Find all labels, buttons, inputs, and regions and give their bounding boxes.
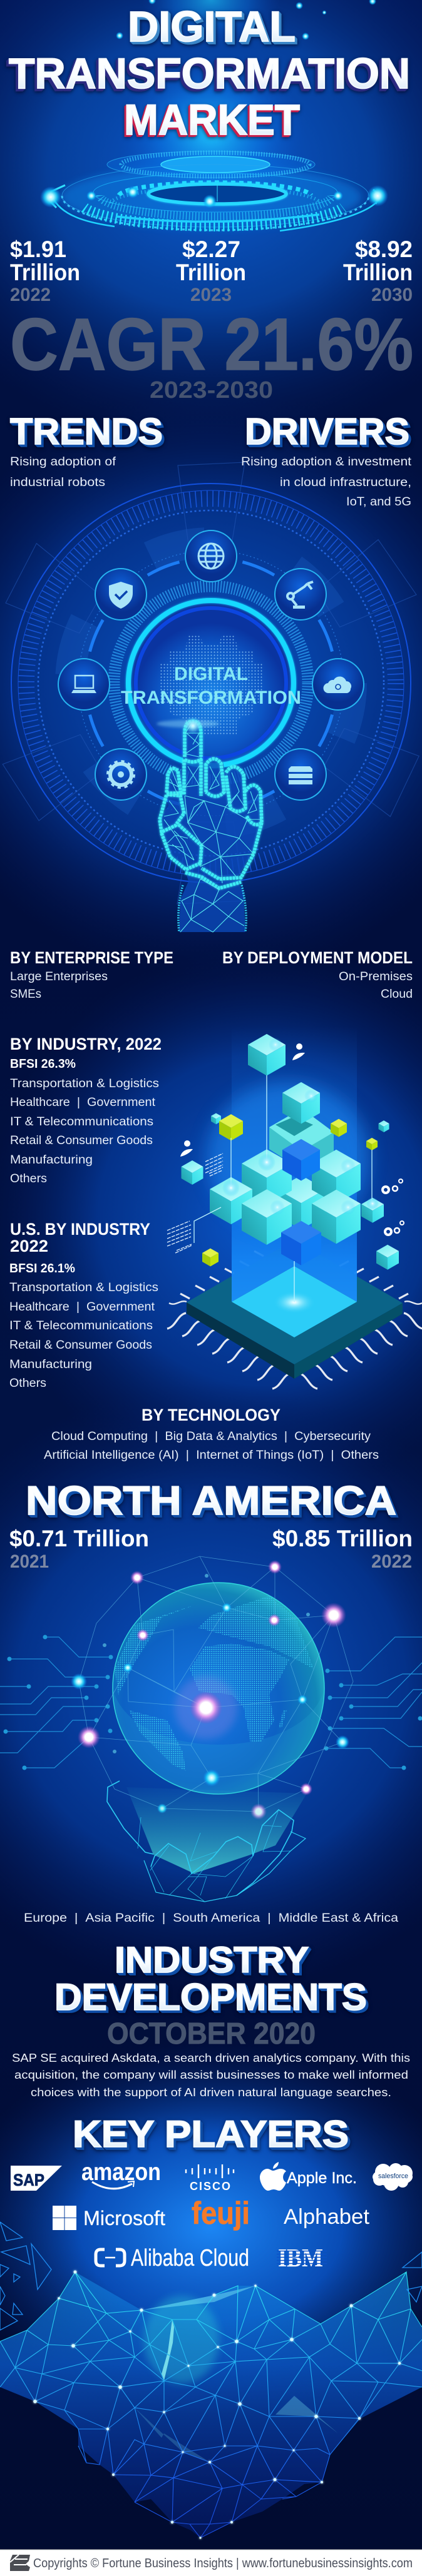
digital transformation circular diagram [3,462,422,904]
logo: amazon: amazon [81,2159,161,2186]
US by industry 2022: U.S. BY INDUSTRY [10,1220,150,1239]
by technology: BY TECHNOLOGY [142,1406,280,1424]
hologram rings and top light glow [40,0,388,231]
by industry 2022: Manufacturing [10,1154,93,1167]
US by industry 2022: Others [9,1377,46,1390]
fragment triangles [0,2222,422,2330]
icon: cloud [312,659,364,710]
icon: server [275,749,326,800]
title: DIGITAL [128,3,296,51]
logo: SAP: SAP [13,2171,44,2189]
title: TRANSFORMATION [9,49,410,98]
title [9,3,410,144]
drivers block: in cloud infrastructure, [280,476,411,489]
by deployment model: On-Premises [339,970,413,983]
by industry 2022: Retail & Consumer Goods [10,1134,153,1147]
data lines [167,1154,223,1253]
isometric chip and cubes illustration [167,1026,422,1389]
back teal block [269,1108,334,1170]
north america heading and values: NORTH AMERICA [26,1478,396,1523]
globe illustration [0,1556,422,1902]
logo: IBM: IBM [278,2243,323,2272]
US by industry 2022: IT & Telecommunications [9,1319,153,1332]
person icons [180,1043,305,1157]
US by industry 2022: Healthcare | Government [9,1301,155,1314]
market size stats: 2023 [190,285,232,305]
icon: laptop [58,659,110,710]
logo: Alibaba Cloud: Alibaba Cloud [131,2245,249,2271]
market size stats: Trillion [176,260,246,285]
logo: Alphabet: Alphabet [284,2205,370,2229]
logo: salesforce [373,2163,413,2191]
trends block [10,411,163,489]
logo: Apple Inc. [260,2162,357,2191]
trends block: TRENDS [10,411,163,452]
by enterprise type: BY ENTERPRISE TYPE [10,948,173,967]
by industry 2022: Healthcare | Government [10,1096,156,1109]
by deployment model [222,948,413,1001]
icon: gear [95,749,147,800]
by industry 2022: BY INDUSTRY, 2022 [10,1035,162,1053]
north america heading and values: $0.85 Trillion [272,1526,413,1551]
holding hand [126,1787,307,1874]
market size stats: $1.91 [10,236,66,262]
logo: Microsoft [53,2206,165,2230]
north america heading and values: 2021 [10,1551,49,1572]
trends block: Rising adoption of [10,455,116,469]
drivers block: Rising adoption & investment [241,455,412,469]
by industry 2022: BFSI 26.3% [10,1057,76,1071]
US by industry 2022 [9,1220,158,1390]
digital transformation circular diagram: TRANSFORMATION [121,687,301,708]
by enterprise type [10,948,173,1001]
market size stats [10,236,413,305]
logo: Alibaba Cloud [96,2245,249,2271]
title: MARKET [124,96,300,144]
logo: Apple Inc.: Apple Inc. [287,2169,357,2187]
north america heading and values: $0.71 Trillion [9,1526,149,1551]
logo: salesforce: salesforce [378,2173,408,2180]
industry developments: DEVELOPMENTS [54,1976,367,2018]
market size stats: Trillion [343,260,413,285]
icon: robot arm [275,569,326,620]
by enterprise type: Large Enterprises [10,970,108,983]
wireframe hand [157,717,262,932]
other regions: Europe | Asia Pacific | South America | Middle East & Africa [24,1912,398,1925]
circuit traces [0,1637,422,1768]
icon: globe [185,530,237,582]
market size stats: Trillion [10,260,80,285]
by deployment model: Cloud [381,988,413,1001]
logo: SAP [11,2166,62,2191]
mesh lines [0,2272,422,2538]
by industry 2022 [10,1035,162,1185]
glowing nodes [130,1571,144,1585]
key players heading: KEY PLAYERS [73,2113,349,2155]
US by industry 2022: 2022 [10,1237,48,1255]
industry developments [12,1940,410,2099]
US by industry 2022: Transportation & Logistics [9,1281,158,1294]
industry developments: choices with the support of AI driven natural language searches. [31,2086,391,2099]
footer logo [10,2555,30,2571]
logo: feuji: feuji [192,2196,250,2231]
gear icons [383,1179,404,1235]
industry developments: OCTOBER 2020 [107,2017,316,2051]
center label: DIGITAL [174,664,248,684]
industry developments: acquisition, the company will assist businesses to make well informed [14,2069,408,2081]
mesh lines [79,1556,353,1812]
logo: cisco: CISCO [190,2180,230,2193]
logo: cisco [186,2164,234,2193]
trends block: industrial robots [10,476,105,489]
bright mesh nodes [33,2271,401,2539]
north america heading and values: 2022 [371,1551,412,1572]
by industry 2022: Transportation & Logistics [10,1077,159,1090]
US by industry 2022: BFSI 26.1% [9,1262,75,1275]
logo: Microsoft: Microsoft [83,2207,165,2229]
drivers block [241,411,412,509]
globe sphere [113,1583,324,1794]
industry developments: INDUSTRY [115,1940,309,1980]
by technology: Artificial Intelligence (AI) | Internet of Things (IoT) | Others [44,1449,379,1462]
market size stats: 2030 [371,285,413,305]
industry developments: SAP SE acquired Askdata, a search driven analytics company. With this [12,2052,410,2064]
by industry 2022: Others [10,1172,47,1185]
connector lines [194,1075,372,1302]
chip pins [167,1251,422,1389]
glow behind cubes [207,1082,369,1232]
by enterprise type: SMEs [10,988,41,1001]
CAGR figure: 2023-2030 [150,377,273,403]
icon: shield [95,569,147,620]
land dots [115,1596,314,1771]
US by industry 2022: Retail & Consumer Goods [9,1339,152,1352]
drivers block: DRIVERS [245,411,409,452]
market size stats: 2022 [10,285,51,305]
north america heading and values [9,1478,413,1572]
chip body [187,1302,403,1379]
light beam [232,1026,357,1302]
market size stats: $8.92 [355,236,413,262]
US by industry 2022: Manufacturing [9,1358,92,1371]
handshake illustration [0,2222,422,2539]
market size stats: $2.27 [182,236,240,262]
by technology [44,1406,379,1462]
footer bar [0,2549,422,2576]
drivers block: IoT, and 5G [346,495,411,509]
dotted gear pattern [160,635,263,735]
by technology: Cloud Computing | Big Data & Analytics | Cybersecurity [51,1430,371,1443]
by industry 2022: IT & Telecommunications [10,1115,153,1128]
